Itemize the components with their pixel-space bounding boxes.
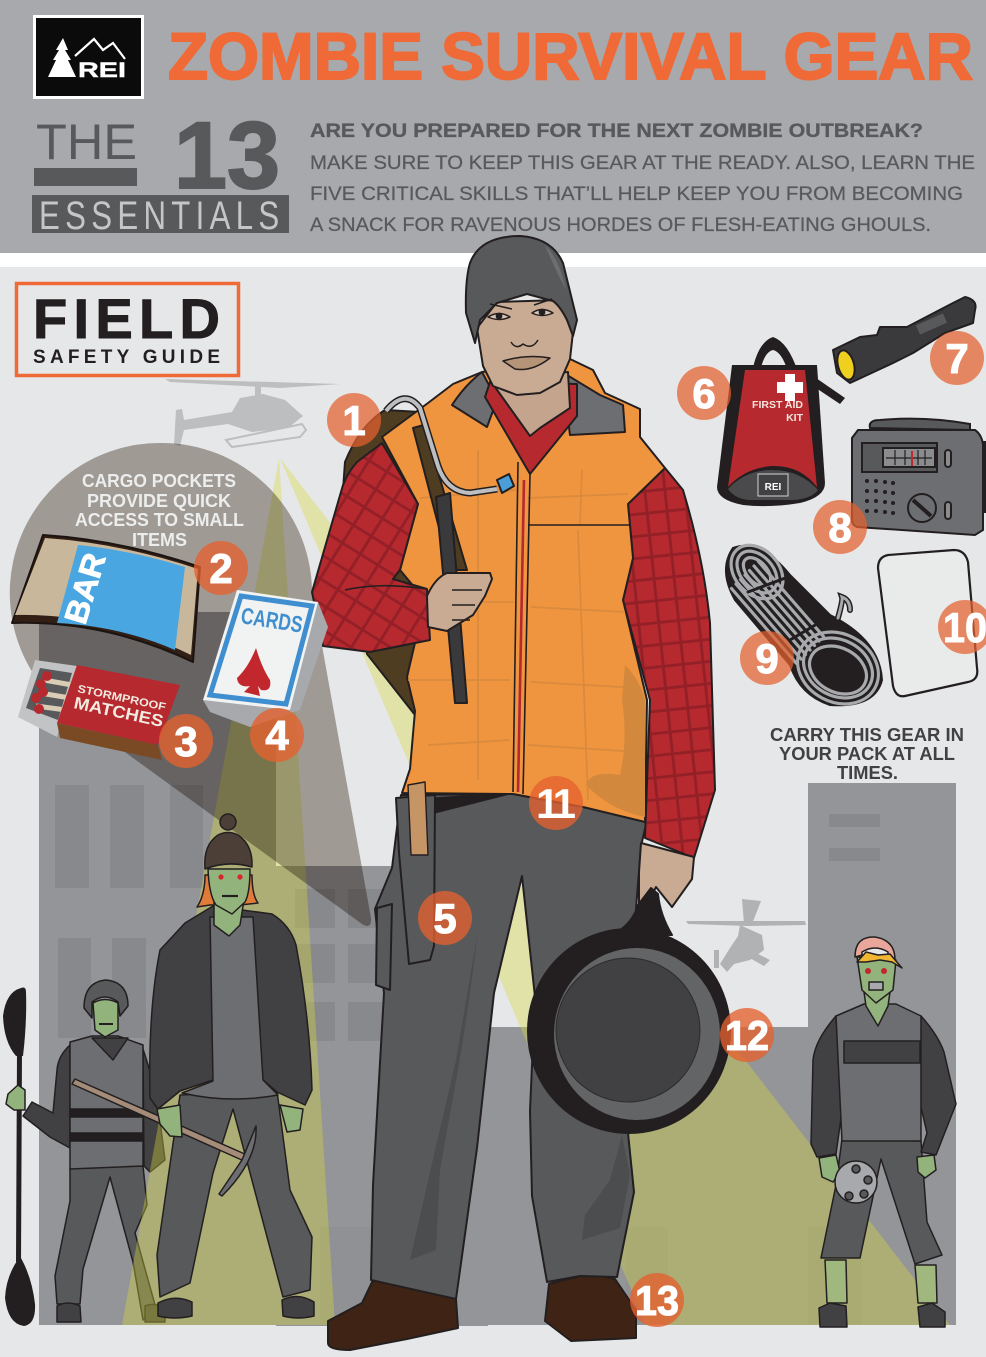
item: matches: MATCHES	[72, 693, 165, 731]
item: flashlight	[833, 297, 976, 383]
cargo pockets note	[75, 471, 244, 550]
item: first aid kit	[717, 337, 845, 506]
number badges: 12	[725, 1012, 769, 1059]
pack gear note: TIMES.	[837, 762, 898, 783]
shirt collar	[485, 382, 577, 474]
knife handle	[408, 782, 428, 855]
field safety guide badge	[16, 284, 238, 376]
the 13 essentials lockup	[32, 103, 289, 238]
face	[477, 300, 573, 395]
cargo pockets note: CARGO POCKETS	[82, 471, 236, 491]
keyhole shadow	[10, 443, 371, 926]
pack strap	[413, 425, 467, 570]
field safety guide badge: FIELD	[33, 287, 220, 350]
hood lining right	[562, 372, 625, 435]
insulated vest	[382, 359, 665, 822]
zombie: flying disc	[811, 937, 956, 1327]
cargo pocket	[376, 904, 392, 990]
intro text: MAKE SURE TO KEEP THIS GEAR AT THE READY. ALSO, LEARN THE	[310, 152, 975, 174]
item: first aid kit: KIT	[786, 412, 804, 424]
cargo pockets note: PROVIDE QUICK	[87, 491, 231, 511]
helicopter: upper left	[165, 379, 340, 447]
item: blank card	[878, 550, 977, 696]
intro text: FIVE CRITICAL SKILLS THAT’LL HELP KEEP YOU FROM BECOMING	[310, 183, 963, 205]
cast iron skillet	[528, 888, 730, 1133]
left sleeve	[312, 443, 430, 652]
item: first aid kit: REI	[765, 482, 782, 493]
flashlight beam B	[280, 458, 950, 1325]
number badges: 7	[945, 335, 969, 382]
zipper	[513, 462, 530, 794]
belt	[410, 793, 512, 815]
helicopter: lower right	[686, 899, 806, 972]
number badges	[159, 331, 986, 1327]
the 13 essentials lockup: ESSENTIALS	[39, 193, 279, 238]
lower hand	[639, 843, 694, 909]
neck	[490, 372, 570, 436]
number badges: 6	[692, 370, 716, 417]
trouser shading	[410, 930, 630, 1260]
hood lining left	[452, 372, 497, 427]
number badges: 4	[265, 712, 289, 759]
item: rope	[721, 535, 891, 718]
item: cards	[203, 590, 328, 727]
forearm crease	[345, 586, 426, 590]
boots	[328, 1273, 636, 1350]
character: survivor	[312, 236, 730, 1350]
the 13 essentials lockup: THE	[36, 114, 137, 170]
pack gear note: CARRY THIS GEAR IN	[770, 724, 964, 745]
facial features	[488, 299, 553, 370]
item: cards: CARDS	[239, 602, 305, 638]
pack gear note: YOUR PACK AT ALL	[779, 743, 955, 764]
flashlight beam A	[122, 458, 335, 1325]
REI logo	[33, 15, 144, 99]
item: bar	[12, 535, 200, 662]
number badges: 8	[828, 504, 852, 551]
number badges: 1	[342, 397, 366, 444]
number badges: 5	[433, 895, 457, 942]
gripping hand	[427, 573, 492, 631]
item: matches: STORMPROOF	[76, 683, 167, 714]
zombie: kayak paddle	[3, 988, 35, 1326]
intro text: ARE YOU PREPARED FOR THE NEXT ZOMBIE OUTBREAK?	[310, 120, 923, 142]
title: ZOMBIE SURVIVAL GEAR	[168, 19, 973, 93]
number badges: 11	[536, 780, 576, 827]
number badges: 3	[174, 718, 198, 765]
beanie highlight	[545, 246, 566, 290]
the 13 essentials lockup: 13	[174, 103, 280, 209]
cargo pockets note: ITEMS	[132, 530, 187, 550]
cargo pockets note: ACCESS TO SMALL	[75, 510, 244, 530]
pack gear note	[770, 724, 964, 783]
zombie: beanie and ice axe	[72, 814, 314, 1318]
number badges: 13	[635, 1277, 679, 1324]
intro text: A SNACK FOR RAVENOUS HORDES OF FLESH-EATING GHOULS.	[310, 214, 931, 236]
trousers	[371, 794, 647, 1299]
number badges: 9	[755, 635, 779, 682]
intro text	[310, 120, 975, 236]
vest quilting	[408, 450, 640, 800]
item: first aid kit: FIRST AID	[752, 399, 803, 411]
number badges: 2	[209, 545, 233, 592]
zombie: life vest	[6, 980, 165, 1322]
right sleeve	[623, 468, 715, 858]
vest shading	[586, 665, 645, 817]
REI logo: REI	[78, 59, 126, 82]
black sternum strap	[436, 493, 467, 703]
item: matches	[18, 660, 180, 760]
beanie	[466, 236, 577, 343]
item: bar: BAR	[57, 549, 113, 628]
field safety guide badge: SAFETY GUIDE	[33, 347, 220, 368]
city buildings	[39, 612, 956, 1326]
header band	[0, 0, 986, 253]
hydration tube	[386, 399, 497, 493]
backpack	[343, 410, 470, 715]
knife sheath	[396, 795, 435, 964]
item: radio	[852, 419, 986, 535]
